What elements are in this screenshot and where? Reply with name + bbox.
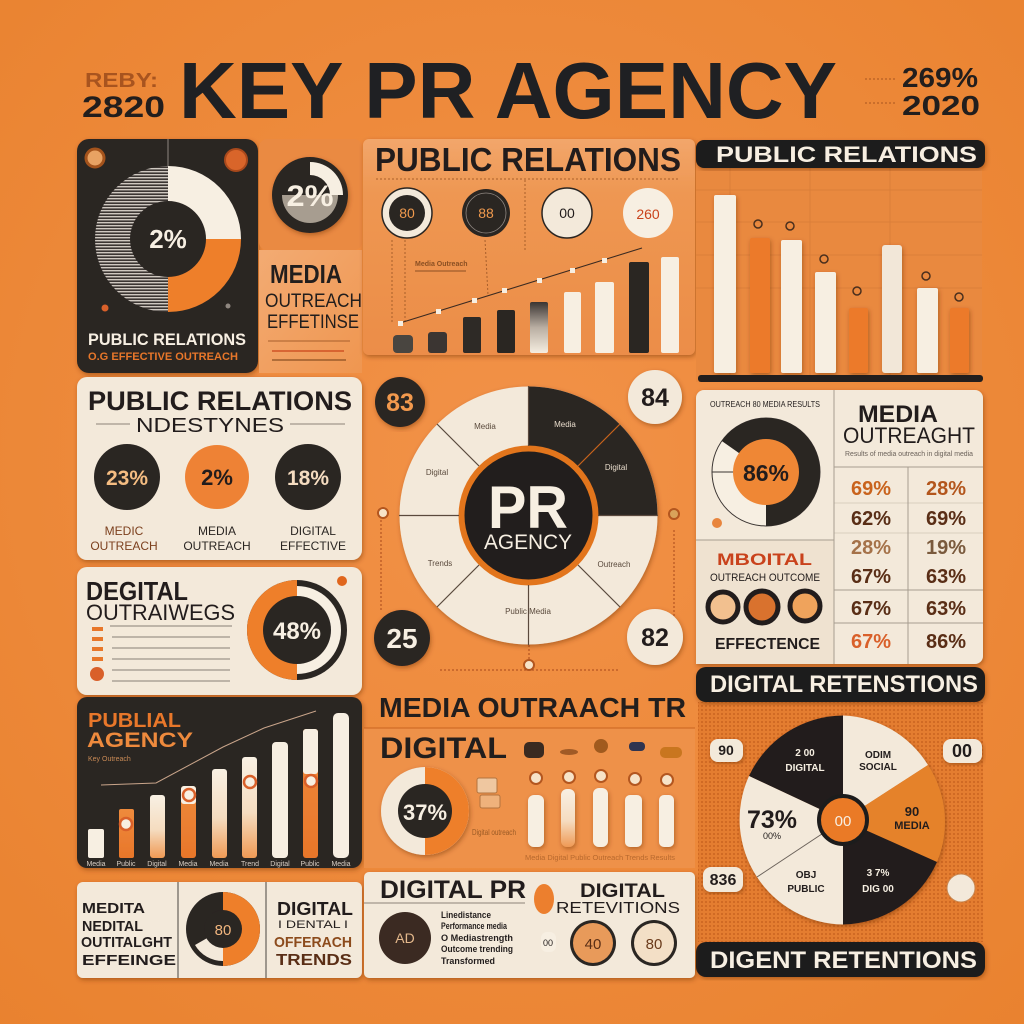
left table column: 67%	[851, 566, 891, 588]
effective line: EFFETINSE	[267, 312, 359, 333]
wheel hub: PR	[488, 474, 568, 541]
body text: Linedistance	[441, 910, 491, 920]
left table column	[851, 478, 891, 653]
left year label: 2820	[82, 91, 165, 124]
pie chart: OBJ	[796, 870, 816, 881]
left text block: MEDITA	[82, 900, 145, 917]
donut chart: 48%	[273, 618, 321, 645]
stat caption 3: DIGITAL	[290, 524, 336, 538]
label 00	[943, 739, 982, 763]
badge: 82: 82	[641, 624, 669, 652]
bottom banner	[696, 942, 985, 977]
stat 2	[185, 445, 249, 509]
right text block: DIGITAL	[277, 899, 353, 919]
icon: left knob	[86, 149, 104, 167]
heading: DIGITAL	[380, 732, 507, 765]
badge: 83: 83	[386, 389, 414, 417]
trend line	[398, 248, 642, 326]
subheading: NDESTYNES	[136, 415, 284, 437]
icon: right knob	[225, 149, 247, 171]
right table column: 69%	[926, 508, 966, 530]
pie value: 00%	[763, 831, 781, 841]
heading: key pr agency: KEY PR AGENCY	[179, 46, 837, 135]
right table column	[926, 478, 966, 653]
wheel chart: Digital	[426, 468, 448, 477]
badge: 83	[375, 377, 425, 427]
wheel hub	[464, 452, 592, 580]
pill markers	[530, 770, 673, 786]
donut chart	[712, 418, 820, 526]
wheel hub: AGENCY	[484, 531, 572, 554]
donut chart: 86%	[743, 460, 789, 486]
panel: media outreach	[259, 250, 362, 373]
heading: PUBLIC RELATIONS	[88, 386, 352, 416]
icon: small pill	[541, 932, 556, 952]
pie chart: 3 7%	[867, 868, 890, 879]
panel: dark bar chart	[77, 697, 362, 868]
left small label: REBY:	[85, 70, 158, 92]
icon: bullet dots	[90, 627, 104, 681]
icon: small pill: 00	[543, 938, 553, 948]
icon: accent dot	[337, 576, 347, 586]
body text: Transformed	[441, 956, 495, 966]
bar markers	[754, 220, 963, 301]
gauge value: 2%	[286, 180, 334, 213]
heading line 1: PUBLIAL	[88, 710, 181, 732]
axis labels: Public	[116, 861, 136, 868]
heading: media outreach: MEDIA OUTRAACH TR	[379, 692, 686, 723]
donut chart: 37%	[403, 800, 447, 825]
left table column: 67%	[851, 598, 891, 620]
panel: top right bars	[696, 140, 985, 382]
left table column: 67%	[851, 631, 891, 653]
body text: O Mediastrength	[441, 933, 513, 943]
icon: orange circle	[570, 920, 616, 966]
stat caption 1: MEDIC	[105, 524, 144, 538]
media heading: MEDIA	[858, 401, 938, 428]
axis caption: Media Digital Public Outreach Trends Results	[525, 855, 676, 862]
axis labels: Digital	[147, 861, 167, 868]
pie chart: MEDIA	[894, 820, 930, 832]
label 836: 836	[710, 872, 736, 889]
small data icons	[477, 778, 500, 808]
axis labels: Media	[178, 861, 198, 868]
pie chart: PUBLIC	[787, 884, 825, 895]
heading line 2: OUTRAIWEGS	[86, 600, 235, 625]
wheel chart: Trends	[428, 559, 452, 568]
axis labels: Media	[209, 861, 229, 868]
bars	[88, 713, 349, 858]
left table column: 69%	[851, 478, 891, 500]
media heading: MEDIA	[270, 259, 342, 289]
stat 1	[94, 444, 160, 510]
right text block	[274, 899, 353, 969]
left text block: OUTITALGHT	[81, 934, 172, 951]
right table column: 19%	[926, 537, 966, 559]
metric circle 3: 00	[559, 205, 575, 221]
right text block: I DENTAL I	[278, 919, 348, 931]
wheel chart: Media	[554, 420, 576, 429]
wheel chart: Public Media	[505, 607, 551, 616]
stat 3	[275, 444, 341, 510]
metric circle 1	[382, 188, 432, 238]
badge: 84	[628, 370, 682, 424]
banner: DIGITAL RETENSTIONS	[710, 671, 978, 698]
wheel chart: Digital	[605, 463, 627, 472]
label 00: 00	[952, 741, 972, 761]
digital heading: MBOITAL	[717, 550, 812, 569]
axis labels: Media	[86, 861, 106, 868]
label 90	[710, 739, 743, 762]
stat caption 2: MEDIA	[198, 524, 236, 538]
icon: orange accent	[534, 884, 554, 914]
pie chart: DIGITAL	[785, 763, 825, 774]
panel: public relations industry	[77, 377, 362, 560]
small caption: Results of media outreach in digital media	[845, 451, 973, 458]
panel sublabel: O.G EFFECTIVE OUTREACH	[88, 351, 238, 363]
small caption: Key Outreach	[88, 756, 131, 763]
icon: three round badges	[708, 591, 820, 623]
badge: 25: 25	[386, 623, 418, 654]
left table column: 28%	[851, 537, 891, 559]
pie chart: SOCIAL	[859, 762, 897, 773]
digital heading: DIGITAL	[580, 881, 665, 902]
donut chart: 2%	[149, 224, 187, 254]
icon: orange circle: 40	[585, 936, 601, 953]
right table column: 28%	[926, 478, 966, 500]
panel: digital bars	[364, 728, 695, 868]
heading line 1: DEGITAL	[86, 576, 188, 606]
donut chart: 80	[215, 922, 231, 939]
small caption: Media Outreach	[415, 261, 468, 268]
wheel chart: Media	[474, 422, 496, 431]
icon: cream dot	[947, 874, 975, 902]
donut chart	[95, 166, 241, 312]
panel: digital retentions pie	[696, 667, 985, 977]
top icons	[524, 739, 682, 758]
icon: dark circle: AD	[395, 930, 415, 946]
pie chart: 2 00	[795, 748, 815, 759]
panel: dark donut	[77, 139, 258, 373]
bottom banner: DIGENT RETENTIONS	[710, 947, 977, 974]
left text block: NEDITAL	[82, 918, 143, 935]
stat caption 2: OUTREACH	[183, 539, 251, 553]
pie hub	[819, 796, 867, 844]
right text block: TRENDS	[276, 952, 352, 969]
axis labels	[86, 861, 351, 868]
axis labels: Media	[331, 861, 351, 868]
panel: digital pr	[364, 872, 695, 978]
heading: DIGITAL PR	[380, 876, 526, 904]
right table column: 86%	[926, 631, 966, 653]
trend line	[101, 711, 316, 785]
wheel markers	[378, 508, 679, 670]
badge: 82	[627, 609, 683, 665]
heading line 2: AGENCY	[87, 729, 193, 752]
badge: 25	[374, 610, 430, 666]
stat 1: 23%	[106, 467, 148, 490]
label 836	[703, 867, 743, 892]
metric circle 2	[462, 189, 510, 237]
panel: public relations line chart	[363, 139, 695, 355]
icon: dark circle	[379, 912, 431, 964]
metric circle 1: 80	[399, 205, 415, 221]
body text	[441, 910, 513, 966]
outreach line: OUTREACH	[265, 291, 362, 312]
badge: 84: 84	[641, 384, 669, 412]
wheel chart: Outreach	[598, 560, 630, 569]
pie chart: DIG 00	[862, 884, 894, 895]
outreach subheading: OUTREACH OUTCOME	[710, 572, 820, 584]
wheel chart	[399, 386, 658, 645]
effectence label: EFFECTENCE	[715, 636, 820, 653]
retentions heading: RETEVITIONS	[556, 900, 680, 917]
right table column: 63%	[926, 598, 966, 620]
small caption: OUTREACH 80 MEDIA RESULTS	[710, 400, 820, 409]
stat caption 3: EFFECTIVE	[280, 539, 346, 553]
metric circle 2: 88	[478, 205, 494, 221]
stat 2: 2%	[201, 465, 233, 490]
left table column: 62%	[851, 508, 891, 530]
panel: digital outreach	[77, 567, 362, 695]
donut chart	[381, 767, 469, 855]
body text: Outcome trending	[441, 944, 513, 954]
pie hub: 00	[835, 813, 851, 830]
metric circle 3	[542, 188, 592, 238]
banner: PUBLIC RELATIONS	[716, 142, 977, 167]
axis labels: Trend	[241, 861, 259, 868]
axis labels: Public	[300, 861, 320, 868]
stat 3: 18%	[287, 467, 329, 490]
pie chart	[740, 716, 945, 924]
panel: bottom left trio	[77, 882, 362, 978]
donut chart	[247, 580, 347, 680]
icon: cream circle	[631, 920, 677, 966]
accent dot	[712, 518, 722, 528]
body text: Performance media	[441, 921, 508, 931]
pie chart: 90	[905, 804, 919, 819]
label 90: 90	[718, 742, 734, 758]
right table column: 63%	[926, 566, 966, 588]
title	[82, 46, 980, 135]
icon: small marks	[102, 304, 230, 312]
small caption: Digital outreach	[472, 828, 516, 837]
metric circle 4	[623, 188, 673, 238]
left text block: EFFEINGE	[82, 952, 176, 969]
right text block: OFFERACH	[274, 934, 352, 951]
axis labels: Digital	[270, 861, 290, 868]
pie chart: ODIM	[865, 750, 891, 761]
pie value: 73%	[747, 806, 797, 834]
heading: PUBLIC RELATIONS	[375, 141, 681, 178]
metric circle 4: 260	[636, 206, 660, 222]
panel: media outreach table	[696, 390, 983, 664]
right percent label: 269%	[902, 62, 978, 93]
outreach heading: OUTREAGHT	[843, 423, 975, 448]
bars	[393, 257, 679, 353]
panel: center wheel	[374, 370, 683, 670]
pill bars	[528, 788, 674, 847]
panel: mini gauge	[259, 139, 362, 250]
bars	[714, 195, 969, 373]
icon: cream circle: 80	[646, 936, 662, 953]
panel label: PUBLIC RELATIONS	[88, 330, 246, 349]
banner	[696, 140, 985, 168]
right year label: 2020	[902, 90, 980, 121]
stat caption 1: OUTREACH	[90, 539, 158, 553]
donut chart	[186, 892, 260, 966]
